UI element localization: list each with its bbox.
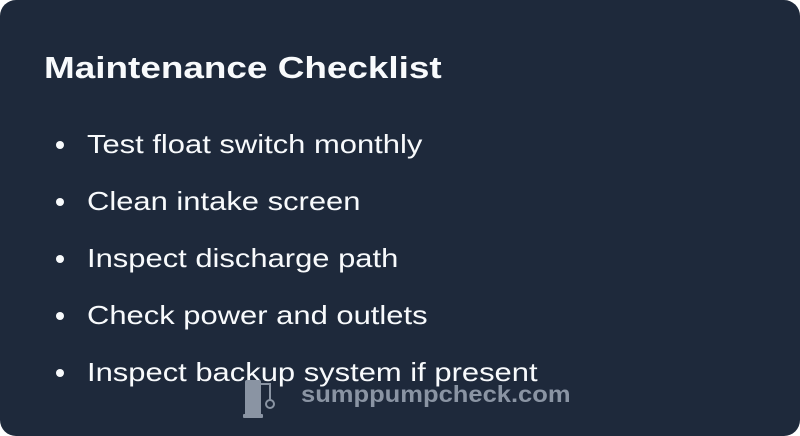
panel: checklist card: Inspect discharge path: [87, 243, 398, 273]
panel: checklist card: Inspect backup system if present: [87, 357, 538, 387]
item 5: [56, 357, 538, 387]
item 1: [56, 129, 422, 159]
watermark: [243, 380, 571, 418]
panel: checklist card: Clean intake screen: [87, 186, 360, 216]
item 2: [56, 186, 360, 216]
list: checklist items: [56, 129, 538, 387]
item 3: [56, 243, 398, 273]
title: Maintenance Checklist: [44, 50, 442, 85]
item 4: [56, 300, 428, 330]
panel: checklist card: Check power and outlets: [87, 300, 428, 330]
panel: checklist card: Test float switch monthly: [87, 129, 422, 159]
watermark text: sumppumpcheck.com: [301, 381, 571, 407]
icon: sump pump: [243, 380, 275, 418]
